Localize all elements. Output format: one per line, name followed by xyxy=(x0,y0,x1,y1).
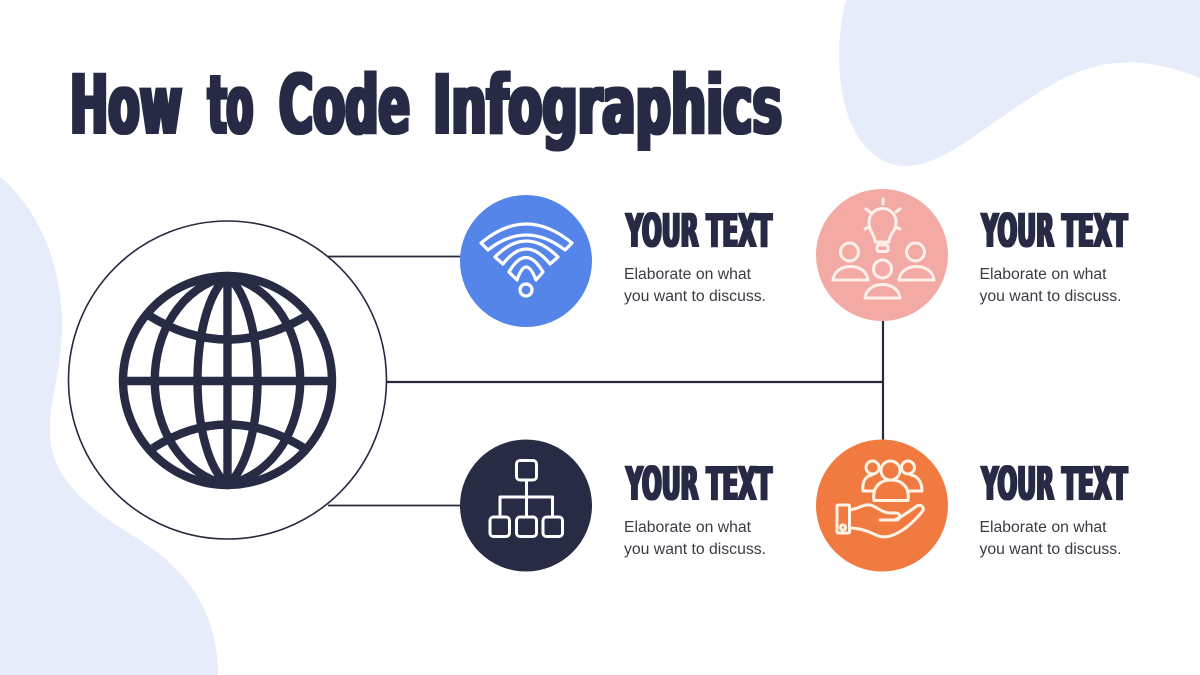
heading and text: hierarchy: you want to discuss. xyxy=(624,541,766,558)
icon: org chart xyxy=(490,460,562,536)
title: Code xyxy=(279,59,410,153)
icon: globe xyxy=(123,276,332,485)
heading and text: wifi xyxy=(624,204,772,305)
icon: wifi xyxy=(481,224,572,296)
heading and text: wifi: YOUR TEXT xyxy=(625,204,772,258)
icon: hand holding people xyxy=(837,461,923,537)
background blob: bottom left xyxy=(0,177,218,675)
heading and text: ideas xyxy=(980,204,1128,305)
heading and text: care: you want to discuss. xyxy=(980,541,1122,558)
heading and text: wifi: you want to discuss. xyxy=(624,288,766,305)
heading and text: hierarchy xyxy=(624,458,772,558)
item: wifi xyxy=(460,195,592,327)
heading and text: ideas: you want to discuss. xyxy=(980,288,1122,305)
heading and text: care: Elaborate on what xyxy=(980,519,1107,536)
item: hierarchy xyxy=(460,440,592,572)
icon: team with light bulb xyxy=(833,199,934,298)
heading and text: hierarchy: YOUR TEXT xyxy=(625,458,772,510)
background blob: top right xyxy=(839,0,1200,166)
item: ideas xyxy=(816,189,948,321)
heading and text: care xyxy=(980,458,1128,558)
item: care xyxy=(816,440,948,572)
connector lines xyxy=(328,256,883,506)
title: How xyxy=(70,59,182,153)
heading and text: wifi: Elaborate on what xyxy=(624,266,752,283)
heading and text: hierarchy: Elaborate on what xyxy=(624,519,752,536)
heading and text: ideas: Elaborate on what xyxy=(980,266,1107,283)
central globe circle xyxy=(68,221,386,539)
title: to xyxy=(208,59,253,153)
title: Infographics xyxy=(433,59,782,153)
